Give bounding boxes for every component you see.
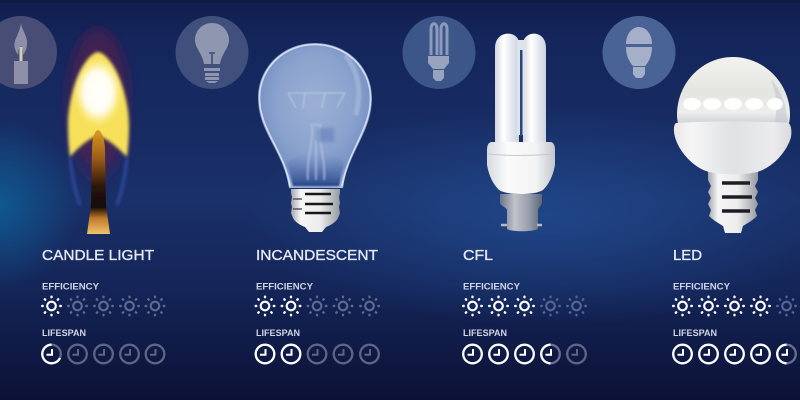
collar — [487, 142, 555, 194]
panel: incandescent — [176, 16, 379, 363]
lifespan label: LIFESPAN — [256, 328, 300, 339]
efficiency label: EFFICIENCY — [42, 282, 100, 292]
efficiency rating: 3 of 5 — [463, 297, 586, 315]
panel: LED — [602, 16, 796, 363]
icon: candle badge — [0, 16, 57, 89]
lifespan label: LIFESPAN — [673, 328, 717, 339]
lifespan label: LIFESPAN — [42, 328, 86, 339]
lifespan rating: about 4.5 of 5 — [673, 345, 796, 363]
illustration: incandescent bulb — [258, 43, 372, 232]
illustration: candle flame — [60, 26, 136, 234]
efficiency rating: 4 of 5 — [673, 297, 796, 315]
heading: CANDLE LIGHT — [42, 247, 154, 264]
screw base — [291, 189, 340, 232]
panel: CFL — [402, 16, 586, 363]
efficiency label: EFFICIENCY — [256, 282, 314, 292]
efficiency rating: 2 of 5 — [256, 297, 379, 315]
lifespan rating: 2 of 5 — [256, 345, 379, 363]
icon: LED badge — [602, 16, 676, 89]
heading: CFL — [463, 247, 493, 264]
lifespan rating: about 1 of 5 — [42, 345, 164, 363]
illustration: LED bulb — [674, 57, 791, 233]
icon: incandescent badge — [176, 16, 248, 89]
efficiency rating: 1 of 5 — [42, 297, 164, 315]
efficiency label: EFFICIENCY — [463, 282, 521, 292]
heading: LED — [673, 247, 702, 264]
bayonet base — [500, 194, 542, 231]
heading: INCANDESCENT — [256, 247, 378, 264]
lifespan label: LIFESPAN — [463, 328, 507, 339]
screw base — [708, 170, 758, 233]
illustration: CFL bulb — [487, 34, 555, 231]
panel: candle light — [0, 16, 164, 363]
efficiency label: EFFICIENCY — [673, 282, 731, 292]
icon: CFL badge — [402, 16, 476, 89]
lifespan rating: about 3.5 of 5 — [463, 345, 586, 363]
